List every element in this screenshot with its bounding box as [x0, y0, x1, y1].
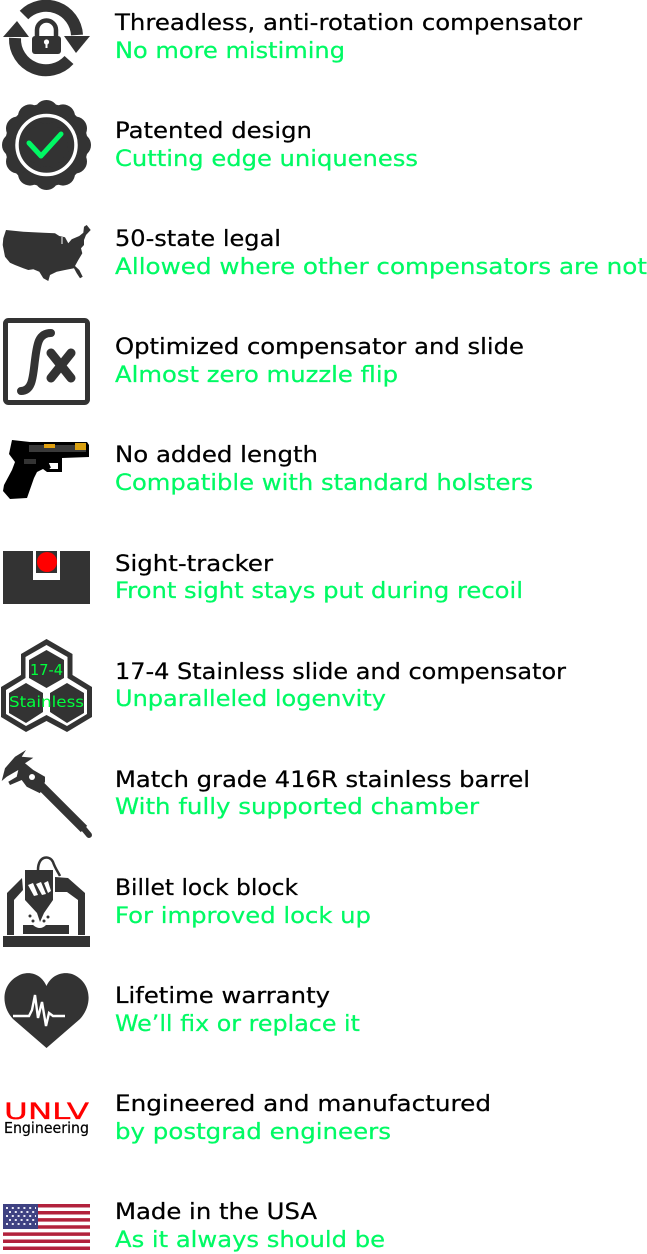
subheading: holsters: Compatible with standard holsters	[115, 470, 533, 496]
subheading: as it should be: As it always should be	[115, 1227, 385, 1253]
subheading: front sight: Front sight stays put during recoil	[115, 578, 523, 604]
heading: optimized: Optimized compensator and slide	[115, 334, 524, 360]
icon: rotation arrows with padlock	[3, 6, 90, 70]
subheading: fix or replace: We’ll fix or replace it	[115, 1011, 360, 1037]
heading: lock block: Billet lock block	[115, 875, 298, 901]
icon: UNLV Engineering logo: Engineering	[4, 1119, 89, 1137]
feature row: no added length	[3, 440, 533, 499]
heading: barrel: Match grade 416R stainless barrel	[115, 767, 530, 793]
feature row: engineered	[4, 1091, 491, 1145]
icon: pistol	[3, 440, 89, 499]
heading: warranty: Lifetime warranty	[115, 983, 330, 1009]
feature row: threadless compensator	[3, 6, 583, 70]
icon: stainless hexagons	[1, 639, 92, 732]
feature row: match grade barrel	[2, 750, 530, 835]
icon: US flag	[3, 1204, 90, 1250]
feature row: 17-4 stainless	[1, 639, 567, 732]
heading: patented: Patented design	[115, 118, 312, 144]
icon: stainless hexagons: 17-4	[30, 661, 63, 679]
heading: engineered: Engineered and manufactured	[115, 1091, 491, 1117]
icon: heart with pulse	[4, 973, 89, 1048]
subheading: muzzle flip: Almost zero muzzle flip	[115, 362, 398, 388]
heading: length: No added length	[115, 442, 318, 468]
feature row: sight-tracker	[3, 551, 523, 604]
feature row: patented design	[2, 100, 418, 190]
subheading: lock up: For improved lock up	[115, 903, 371, 929]
subheading: longevity: Unparalleled logenvity	[115, 686, 386, 712]
feature row: billet lock block	[3, 857, 371, 947]
subheading: allowed: Allowed where other compensators are not	[115, 254, 647, 280]
subheading: chamber: With fully supported chamber	[115, 794, 480, 820]
heading: sight-tracker: Sight-tracker	[115, 551, 274, 577]
heading: 50-state: 50-state legal	[115, 226, 281, 252]
icon: badge with check mark	[2, 100, 91, 190]
heading: USA: Made in the USA	[115, 1199, 318, 1225]
subheading: uniqueness: Cutting edge uniqueness	[115, 146, 418, 172]
icon: map of the USA	[3, 225, 91, 281]
icon: UNLV Engineering logo	[4, 1100, 89, 1137]
feature row: made in USA	[3, 1199, 385, 1253]
icon: caliper	[2, 750, 89, 835]
icon: UNLV Engineering logo: UNLV	[4, 1100, 89, 1125]
icon: stainless hexagons: Stainless	[9, 693, 84, 711]
feature row: optimized compensator	[6, 320, 524, 402]
icon: CNC machine	[3, 857, 90, 947]
subheading: mistiming: No more mistiming	[115, 38, 345, 64]
icon: sight with red dot	[3, 551, 90, 604]
heading: 17-4: 17-4 Stainless slide and compensator	[115, 659, 567, 685]
feature row: lifetime warranty	[4, 973, 360, 1048]
feature row: 50-state legal	[3, 225, 647, 281]
icon: function symbol box	[6, 320, 88, 402]
subheading: postgrad: by postgrad engineers	[115, 1119, 391, 1145]
heading: threadless: Threadless, anti-rotation compensator	[114, 10, 583, 36]
